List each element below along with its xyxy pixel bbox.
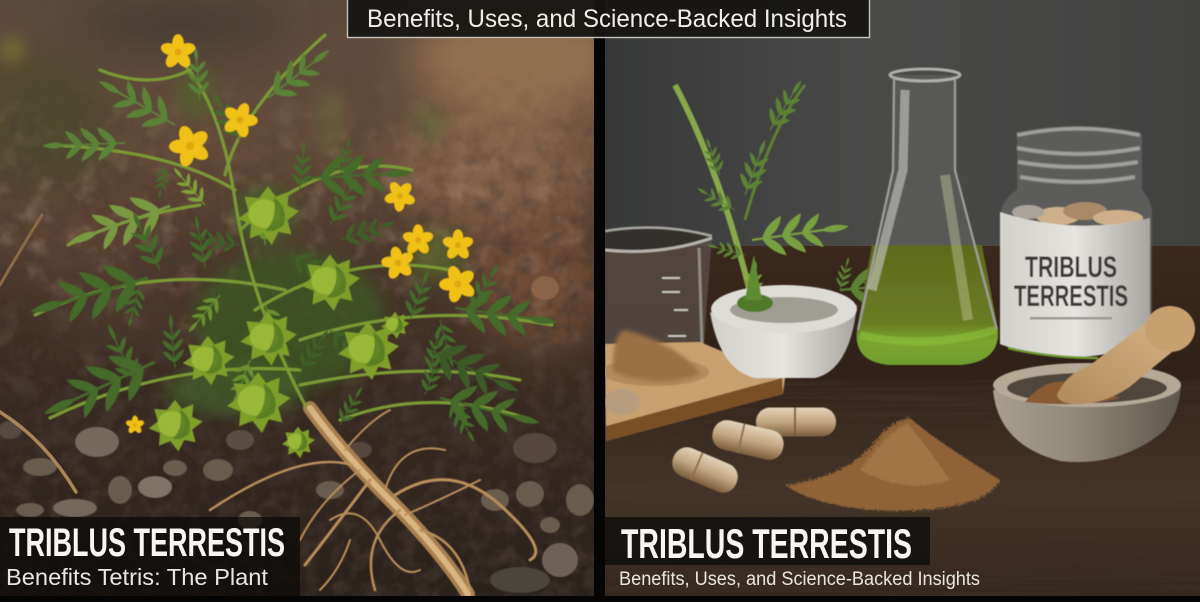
supplement jar: [1000, 128, 1152, 358]
jar label text: TRIBLUS: [1025, 251, 1117, 284]
jar label text: TERRESTIS: [1014, 280, 1128, 313]
background blurred soil tones: [0, 0, 630, 350]
glass flask with green liquid: [857, 69, 998, 365]
left caption: plant title: Benefits Tetris: The Plant: [6, 564, 269, 590]
dense foliage mass: [165, 69, 465, 416]
powder pile: [785, 418, 1000, 511]
bottom black edge: [0, 596, 1200, 602]
panel: the plant photo: [0, 0, 630, 597]
right caption: product title: TRIBLUS TERRESTIS: [621, 520, 912, 567]
plant: [23, 34, 560, 458]
twigs: [0, 215, 76, 492]
wooden board with powder: [601, 330, 785, 441]
green burrs: [149, 186, 409, 458]
capsules inside jar: [1012, 202, 1143, 226]
divider between panels: [594, 0, 605, 602]
header title banner: Benefits, Uses, and Science-Backed Insights: [367, 5, 847, 33]
plant leaves: [23, 37, 560, 447]
soil texture: [0, 98, 594, 596]
beaker with measurements: [605, 227, 712, 345]
white bowl: [710, 255, 857, 378]
left caption: plant title: TRIBLUS TERRESTIS: [9, 521, 285, 565]
jar label text: [1014, 251, 1128, 320]
pestle and mortar: [993, 306, 1195, 462]
small plant sprig: [675, 74, 939, 320]
plant stems: [35, 35, 552, 420]
right caption: product title: [605, 517, 980, 590]
roots: [210, 408, 536, 594]
left caption: plant title: [0, 517, 300, 596]
yellow flowers: [125, 34, 483, 434]
panel: the products still life: [601, 0, 1200, 597]
capsules: [668, 408, 836, 497]
pebbles: [0, 276, 594, 593]
right caption: product title: Benefits, Uses, and Science-Backed Insights: [619, 569, 980, 590]
wood grain: [605, 380, 1200, 597]
blurred background sprouts: [2, 38, 446, 150]
